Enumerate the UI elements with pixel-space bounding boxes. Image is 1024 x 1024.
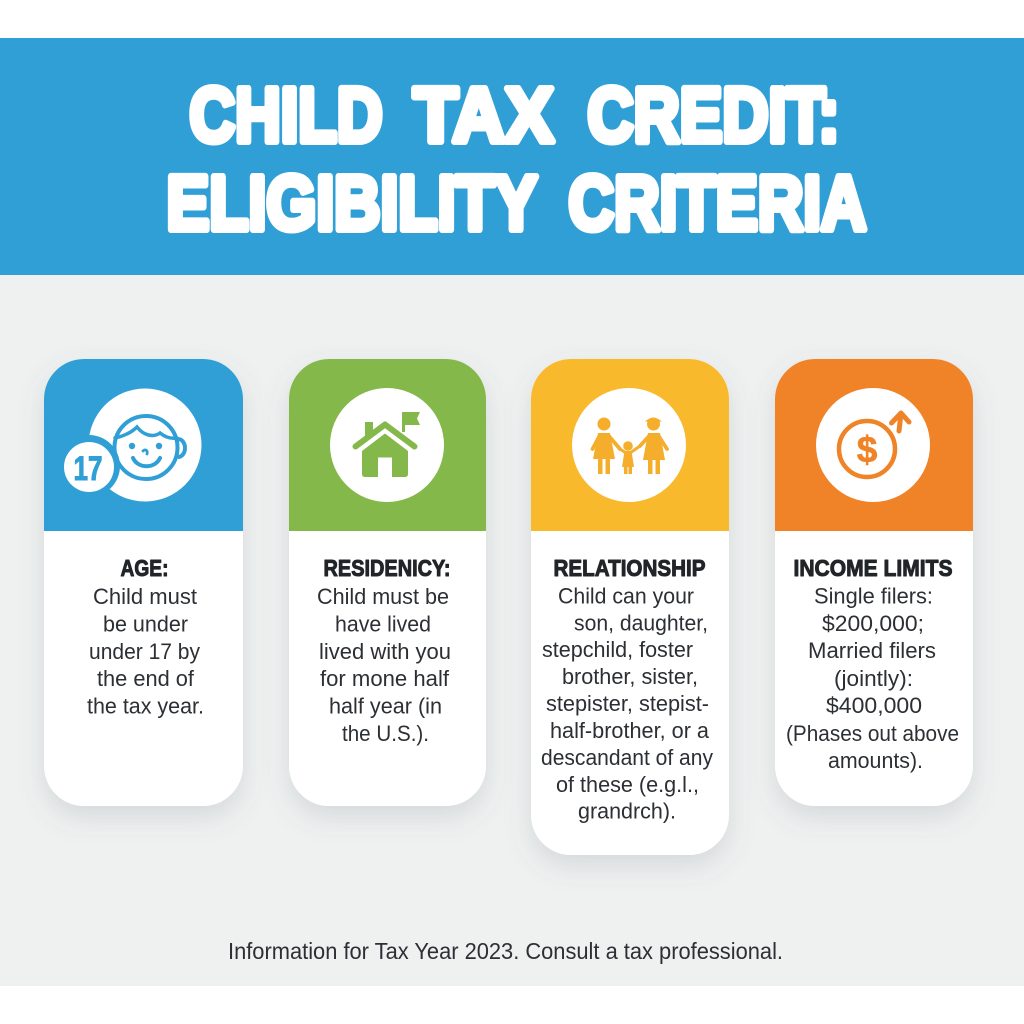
icon: house with flag [330,388,444,502]
panel: age [44,359,243,806]
text: residency details: Child must be [317,584,449,609]
icon: dollar coin with up arrow: $ [857,429,878,470]
text: residency details [317,584,451,746]
text: income details: Married filers [808,638,936,663]
text: relationship details: brother, sister, [562,664,698,689]
text: relationship details: half-brother, or a [550,718,710,743]
title: ELIGIBILITY [166,160,538,246]
icon: dollar coin with up arrow [816,388,930,502]
text: relationship details: descandant of any [541,745,713,770]
text: age details: Child must [93,584,197,609]
page background [0,275,1024,986]
title: CREDIT: [588,72,840,158]
text: relationship details: stepchild, foster [542,637,693,662]
footer note: Information for Tax Year 2023. Consult a tax professional. [228,938,783,964]
text: age details: under 17 by [89,639,200,664]
icon: child face with age 17 badge [58,388,202,502]
icon: family holding hands [572,388,686,502]
text: income details: $400,000 [826,693,922,718]
title: CHILD [190,72,382,158]
text: residency details: for mone half [320,666,450,691]
icon: child face with age 17 badge: 17 [74,450,102,488]
text: relationship details: son, daughter, [574,610,708,636]
title: TAX [414,72,554,158]
panel: income limits [775,359,973,806]
header banner [0,38,1024,275]
text: residency details: half year (in [329,694,442,718]
text: income details: Single filers: [814,584,933,608]
title: CRITERIA [568,160,866,246]
text: age details [87,584,204,718]
text: residency details: have lived [335,612,431,636]
text: income details: $200,000; [822,611,924,636]
text: residency details: lived with you [319,639,451,664]
text: relationship details: Child can your [558,584,694,608]
title [166,72,866,246]
text: age details: the end of [97,666,195,691]
heading: residency: RESIDENICY: [324,555,450,581]
text: income details: (jointly): [834,666,913,691]
text: age details: the tax year. [87,694,204,718]
heading: age: AGE: [120,555,168,581]
heading: relationship: RELATIONSHIP [554,555,706,581]
panel: relationship [531,359,729,855]
text: relationship details [541,584,713,824]
text: relationship details: of these (e.g.l., [556,772,699,797]
text: relationship details: grandrch). [578,798,676,824]
panel: residency [289,359,486,806]
text: age details: be under [103,612,188,636]
text: relationship details: stepister, stepist- [546,691,709,716]
heading: income limits: INCOME LIMITS [794,555,952,581]
text: income details: (Phases out above [786,721,959,746]
text: income details: amounts). [828,748,923,773]
text: residency details: the U.S.). [342,721,429,746]
text: income details [786,584,959,773]
